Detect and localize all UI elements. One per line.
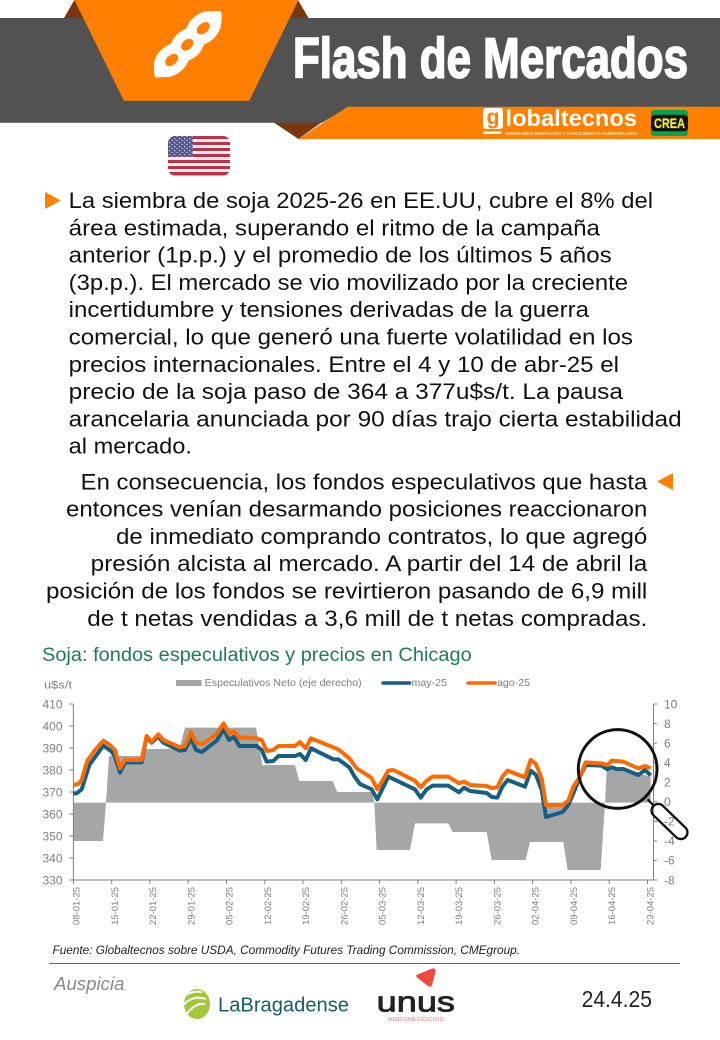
left axis labels: 360 [42,807,63,821]
logo: La Bragadense [183,989,349,1019]
date labels: 26-03-25 [492,887,503,925]
logo: CREA: CREA [654,115,685,131]
orange trapezoid [74,0,298,101]
sponsor label: Auspicia [53,974,124,994]
date labels: 12-03-25 [416,887,427,925]
right axis labels: 4 [664,756,671,770]
bullet arrow left [657,473,673,490]
text block: first paragraph: al mercado. [69,434,192,459]
date labels: 08-01-25 [72,887,82,925]
left axis labels [42,697,63,887]
date labels: 23-04-25 [646,887,656,925]
left axis labels: 340 [42,851,63,865]
date labels: 19-03-25 [454,887,465,925]
left axis labels: 330 [42,873,63,887]
date labels: 05-02-25 [225,887,236,925]
text block: first paragraph: precio de la soja paso de 364 a 377u$s/t. La pausa [69,379,624,404]
logo: globaltecnos [483,105,637,136]
line: may-25 [73,729,651,817]
text block: first paragraph: comercial, lo que generó una fuerte volatilidad en los [69,324,633,350]
icon: green swoosh [183,989,210,1019]
orange strip [298,107,720,139]
text block: first paragraph: (3p.p.). El mercado se vio movilizado por la creciente [69,270,628,295]
legend: u$s/t [44,680,72,692]
left axis labels: 390 [42,741,63,755]
date labels: 02-04-25 [531,887,542,925]
logo: globaltecnos: lobaltecnos [506,105,637,131]
legend [44,677,530,692]
text block: first paragraph: anterior (1p.p.) y el promedio de los últimos 5 años [69,243,612,268]
right axis labels [664,697,678,887]
date labels: 29-01-25 [186,887,197,925]
right axis labels: 6 [664,736,671,750]
text block: second paragraph: entonces venían desarmando posiciones reaccionaron [66,497,647,522]
left axis labels: 370 [42,785,63,799]
icon: magnifying glass [578,730,690,842]
legend: may-25 [412,677,447,689]
logo: Unus: unus [377,987,455,1019]
text block: first paragraph: incertidumbre y tensiones derivadas de la guerra [69,297,590,322]
text block: second paragraph: posición de los fondos se revirtieron pasando de 6,9 mill [46,578,647,604]
date labels: 22-01-25 [148,887,159,925]
right axis labels: -8 [664,873,675,887]
date labels: 26-02-25 [339,887,350,925]
text block: first paragraph [69,188,682,459]
chart: funds and Chicago prices [42,677,690,925]
top brown folds [64,0,322,139]
text block: first paragraph: área estimada, superando el ritmo de la campaña [69,215,601,240]
text block: first paragraph: arancelaria anunciada por 90 días trajo cierta estabilidad [69,406,682,431]
left axis labels: 350 [42,829,63,843]
text block: second paragraph: de inmediato comprando contratos, lo que agregó [116,524,647,549]
logo: Unus: AGRONEGOCIOS [388,1017,444,1023]
text block: second paragraph: presión alcista al mercado. A partir del 14 de abril la [91,551,648,576]
date labels: 16-04-25 [607,887,618,925]
axes [69,704,657,884]
text block: second paragraph [46,469,648,631]
area: net speculative position [73,728,651,870]
right axis labels: 2 [664,776,671,790]
text block: second paragraph: En consecuencia, los fondos especulativos que hasta [81,469,648,494]
date: 24.4.25 [582,986,652,1012]
logo: CREA [651,110,688,136]
right axis labels: 0 [664,795,671,809]
right axis labels: -6 [664,854,675,868]
text block: first paragraph: precios internacionales. Entre el 4 y 10 de abr-25 el [69,352,619,377]
logo: globaltecnos: g [486,106,500,129]
legend: Especulativos Neto (eje derecho) [205,677,362,689]
date labels: 15-01-25 [110,887,121,925]
line: ago-25 [73,723,651,805]
text block: first paragraph: La siembra de soja 2025-26 en EE.UU, cubre el 8% del [69,188,653,213]
date labels [72,887,656,925]
dark band [0,18,720,123]
icon: US flag [168,136,230,176]
right axis labels: 8 [664,717,671,731]
date labels: 19-02-25 [301,887,312,925]
right axis labels: -2 [664,815,675,829]
logo: Unus [377,968,455,1023]
bullet arrow right [45,192,61,209]
icon: soybean pod [147,4,228,84]
series lines and magnifier [73,723,690,842]
date labels: 09-04-25 [569,887,580,925]
legend: ago-25 [497,677,530,689]
logo: globaltecnos: GENERAMOS INNOVACIÓN Y CONOCIMIENTO AGROPECUARIO [505,129,637,136]
left axis labels: 380 [42,763,63,777]
text block: second paragraph: de t netas vendidas a 3,6 mill de t netas compradas. [87,606,647,631]
left axis labels: 410 [42,697,63,711]
right axis labels: -4 [664,834,675,848]
date labels: 12-02-25 [263,887,274,925]
right axis labels: 10 [664,697,678,711]
left axis labels: 400 [42,719,63,733]
source note: Fuente: Globaltecnos sobre USDA, Commodity Futures Trading Commission, CMEgroup. [52,945,520,957]
date labels: 05-03-25 [378,887,389,925]
logo: La Bragadense: LaBragadense [218,994,349,1017]
header banner [0,0,720,139]
chart title: Soja: fondos especulativos y precios en Chicago [42,645,472,666]
